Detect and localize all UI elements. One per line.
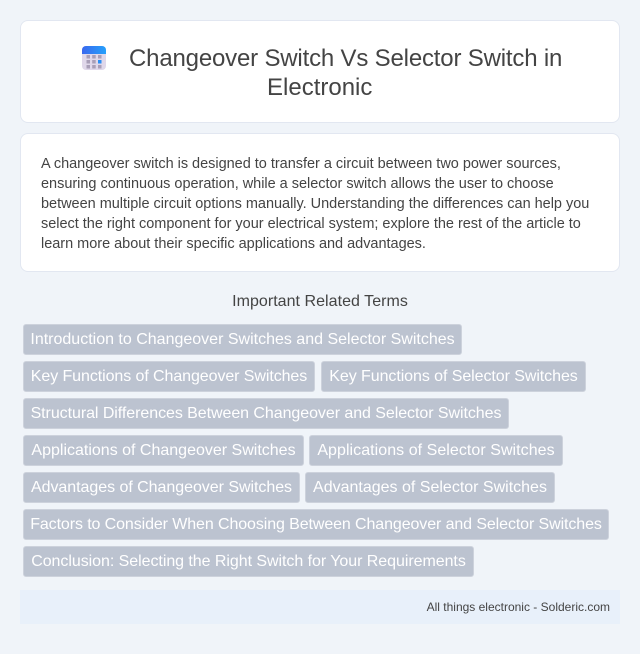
intro text: learn more about their specific applications and advantages. [41,236,426,252]
tag [23,324,462,355]
tag: Conclusion: Selecting the Right Switch for Your Requirements [31,553,466,570]
related term tags [23,324,609,577]
tag [23,509,609,540]
footer: All things electronic - Solderic.com [427,600,610,614]
tag [23,472,300,503]
intro text: between multiple circuit options manually. Understanding the differences can help you [41,196,589,212]
title: Changeover Switch Vs Selector Switch in [129,45,562,72]
tag: Advantages of Changeover Switches [31,479,292,496]
tag: Key Functions of Changeover Switches [31,368,307,385]
footer [20,590,620,624]
tag [309,435,563,466]
title: Electronic [267,74,372,101]
tag [305,472,555,503]
intro text: A changeover switch is designed to transfer a circuit between two power sources, [41,156,561,172]
tag: Introduction to Changeover Switches and Selector Switches [30,331,455,348]
intro text [41,156,589,252]
intro panel [20,133,620,272]
tag [23,435,304,466]
intro text: ensuring continuous operation, while a selector switch allows the user to choose [41,176,554,192]
header panel [20,20,620,123]
icon: calendar grid [82,46,106,70]
tag: Applications of Selector Switches [317,442,555,459]
tag [321,361,586,392]
related terms heading: Important Related Terms [232,293,408,310]
tag [23,546,474,577]
tag: Applications of Changeover Switches [31,442,296,459]
tag: Advantages of Selector Switches [313,479,547,496]
intro text: select the right component for your electrical system; explore the rest of the article to [41,216,581,232]
tag [23,398,509,429]
tag: Factors to Consider When Choosing Between Changeover and Selector Switches [30,516,602,533]
tag: Key Functions of Selector Switches [329,368,578,385]
title [129,45,562,101]
tag [23,361,315,392]
tag: Structural Differences Between Changeover and Selector Switches [31,405,501,422]
